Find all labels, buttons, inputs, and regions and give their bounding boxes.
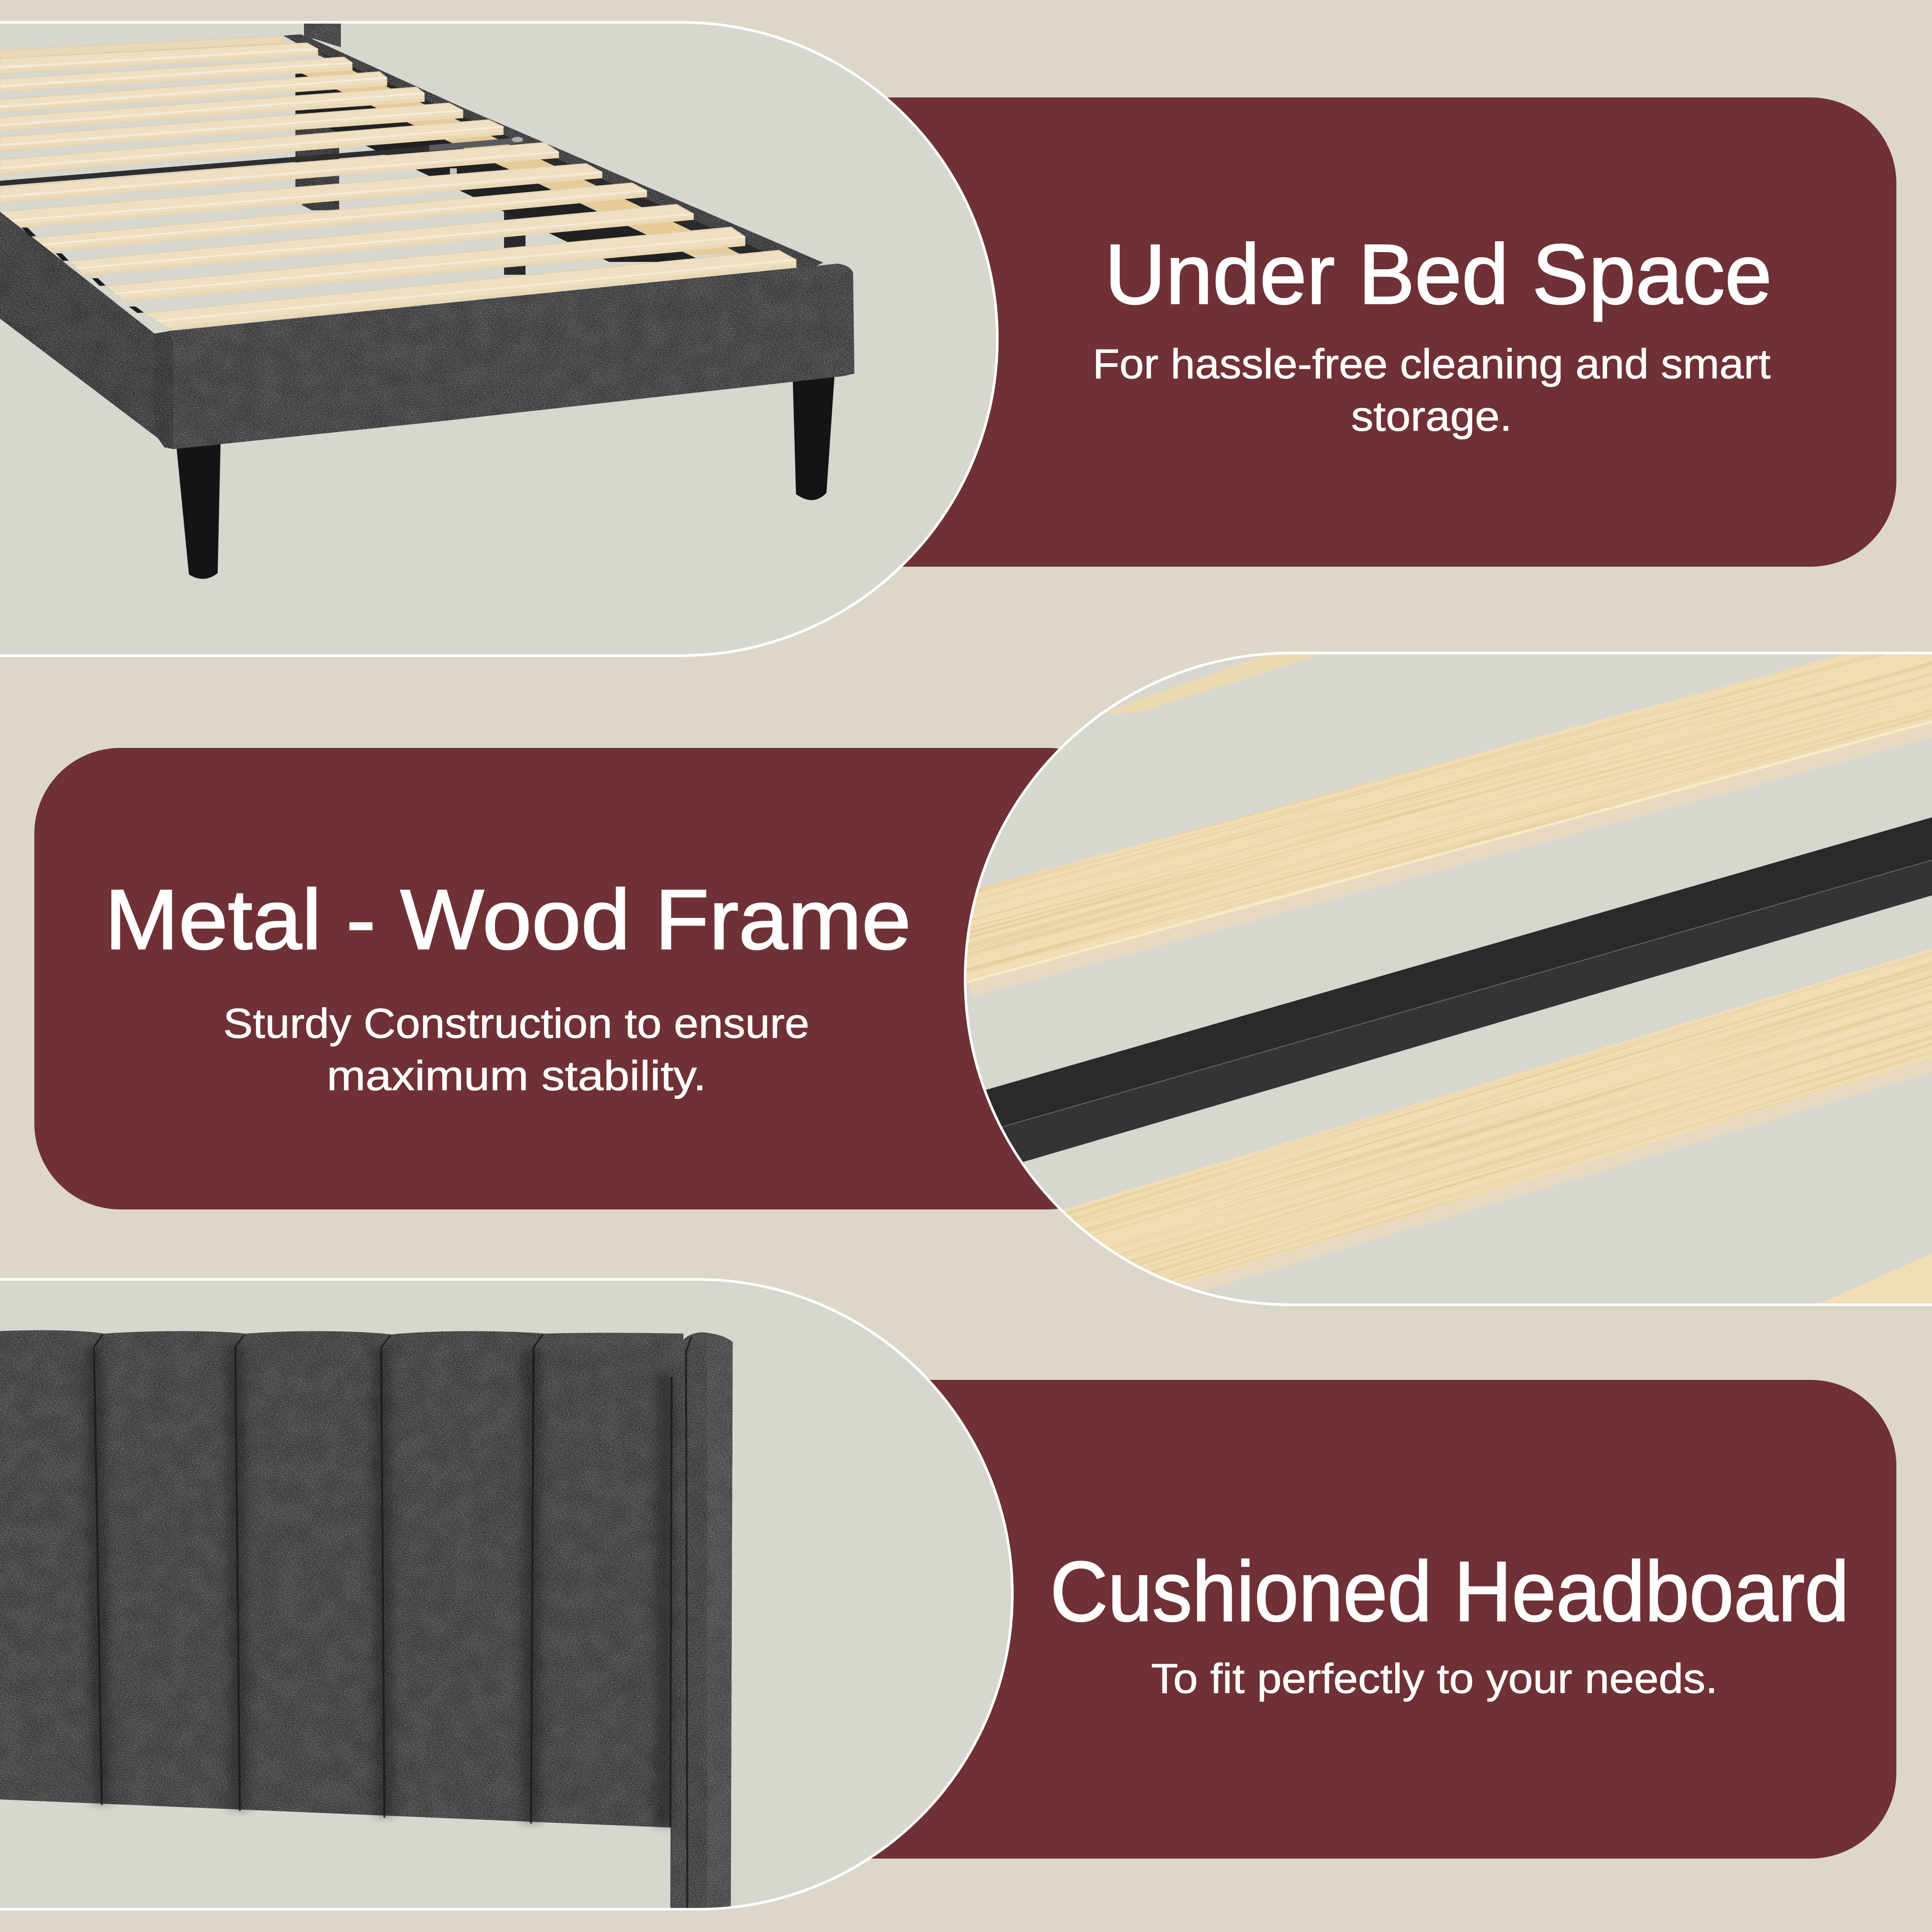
red card: cushioned headboard — [773, 1380, 1896, 1859]
wooden side rail — [296, 60, 738, 255]
channel shading — [94, 1347, 665, 1827]
heading: metal wood frame: Metal - Wood Frame — [105, 872, 911, 967]
headboard post — [304, 23, 341, 47]
panel: metal wood frame — [34, 748, 1133, 1209]
panel: under bed space — [773, 97, 1896, 567]
side rail — [0, 212, 158, 438]
slat highlights — [0, 49, 796, 321]
heading: under bed space: Under Bed Space — [1105, 227, 1772, 322]
upper wood sliver — [1099, 653, 1326, 714]
description: under bed space: For hassle-free cleaning and smart — [1093, 340, 1771, 387]
headboard channels — [0, 1330, 683, 1828]
description: under bed space — [1093, 340, 1771, 440]
black inner rail — [295, 73, 704, 262]
front rail — [168, 264, 854, 449]
headboard wing — [670, 1332, 733, 1916]
red card: under bed space — [773, 97, 1896, 567]
slat shaded lower edges — [0, 54, 796, 328]
photo panel: bed frame and legs — [0, 22, 997, 656]
far side rail — [283, 34, 823, 270]
wood slat two — [945, 924, 1932, 1358]
bed legs — [176, 368, 835, 579]
description: metal wood frame: maximum stability. — [327, 1052, 706, 1099]
wood slat three — [1817, 1244, 1932, 1314]
dark rail edge — [318, 52, 799, 267]
description: cushioned headboard: To fit perfectly to your needs. — [1151, 1655, 1718, 1702]
panel: cushioned headboard — [773, 1380, 1896, 1859]
second support post — [504, 162, 526, 275]
metal bar — [945, 811, 1932, 1185]
corner seam band — [155, 331, 173, 449]
metal cross beam — [0, 137, 524, 186]
wood slats — [0, 36, 796, 330]
channel grooves — [94, 1334, 691, 1916]
photo panel: headboard — [0, 1279, 1012, 1916]
description: metal wood frame: Sturdy Construction to ensure — [223, 1000, 809, 1047]
heading: cushioned headboard: Cushioned Headboard — [1050, 1544, 1849, 1639]
center support leg — [295, 112, 339, 210]
red card: metal wood frame — [34, 748, 1133, 1209]
photo panel: wood slats and metal bar — [945, 606, 1932, 1358]
description: metal wood frame — [223, 1000, 809, 1099]
wood slat one — [945, 606, 1932, 997]
description: under bed space: storage. — [1351, 393, 1512, 440]
slat notches on side rail — [21, 228, 144, 313]
